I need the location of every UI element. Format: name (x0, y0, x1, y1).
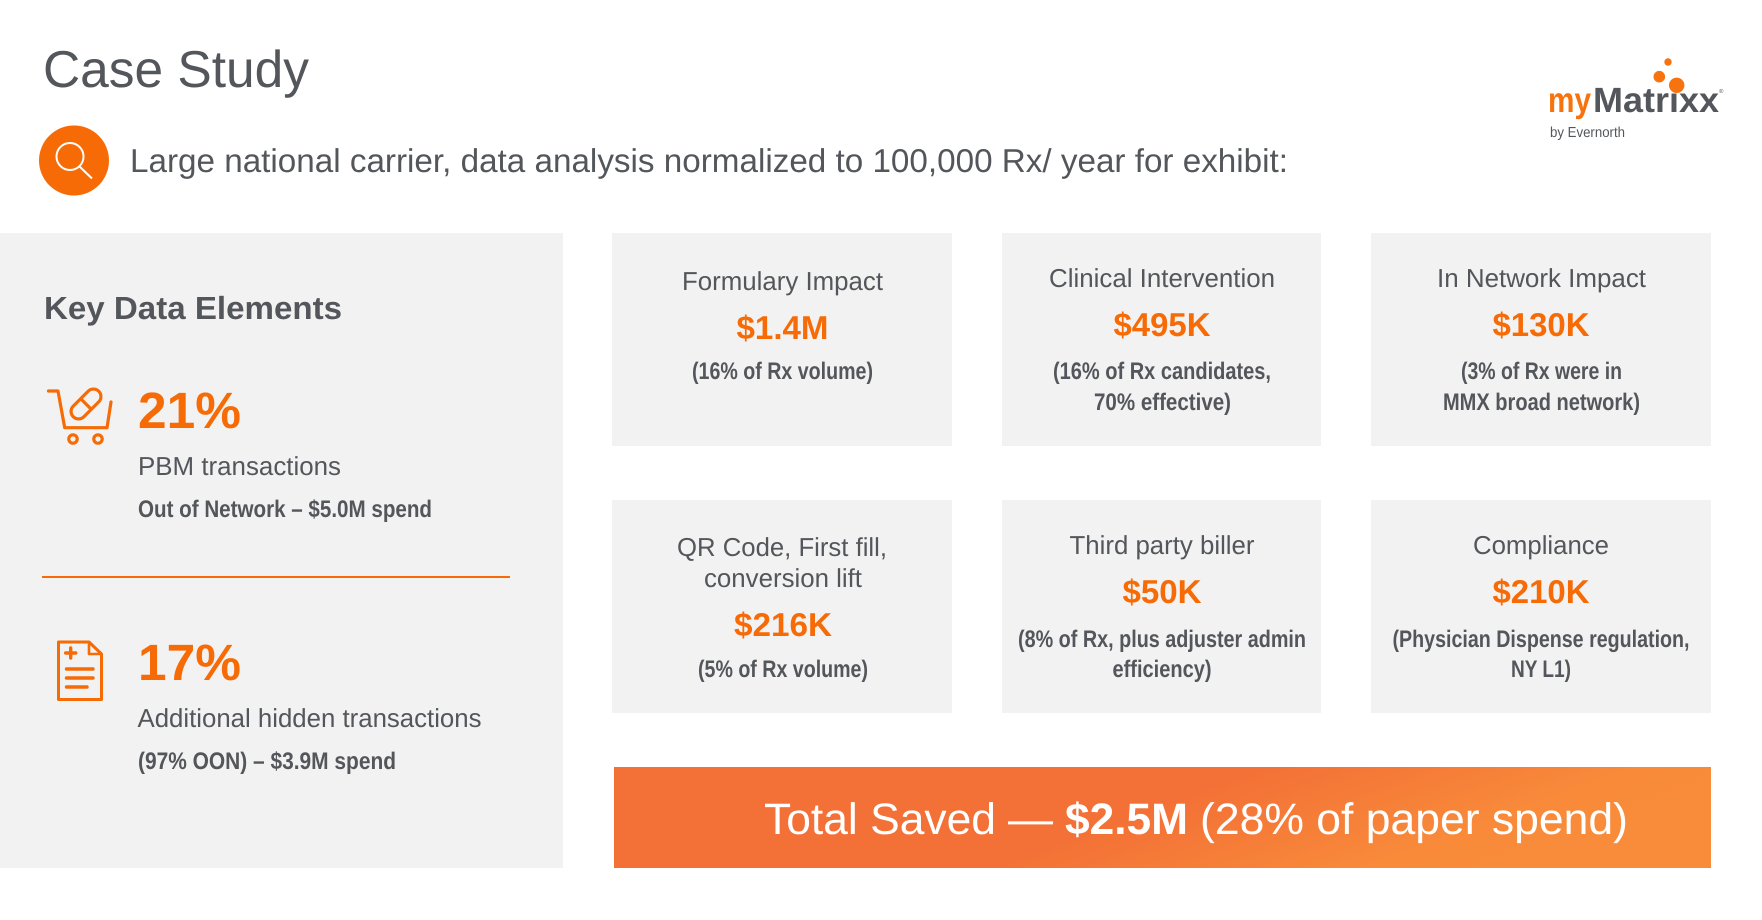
logo: myMatrixx by Evernorth: Matrixx (1593, 81, 1720, 120)
card: in network impact: In Network Impact (1437, 263, 1647, 293)
detail: out of network spend: Out of Network – $5.0M spend (138, 496, 432, 523)
card: clinical intervention: (16% of Rx candidates, (1053, 358, 1271, 385)
banner: total saved: — (1008, 795, 1053, 844)
card: third party biller: Third party biller (1070, 530, 1255, 560)
banner: total saved (614, 767, 1711, 868)
card: compliance: NY L1) (1511, 656, 1571, 683)
banner: total saved: $2.5M (1065, 795, 1188, 844)
card: formulary impact (612, 233, 952, 446)
card: formulary impact: $1.4M (736, 309, 828, 346)
icon: magnifying glass (39, 126, 109, 196)
card: compliance: $210K (1492, 573, 1590, 610)
card: clinical intervention: 70% effective) (1094, 389, 1231, 416)
card: clinical intervention (1002, 233, 1321, 446)
logo: myMatrixx by Evernorth: my (1548, 81, 1591, 120)
card: QR code conversion lift: (5% of Rx volume) (698, 656, 868, 683)
detail: OON spend: (97% OON) – $3.9M spend (138, 748, 396, 775)
logo: myMatrixx by Evernorth (1548, 58, 1724, 141)
card: QR code conversion lift (612, 500, 952, 713)
logo: myMatrixx by Evernorth: ® (1719, 88, 1724, 95)
card: third party biller: efficiency) (1112, 656, 1212, 683)
subtitle: Large national carrier, data analysis normalized to 100,000 Rx/ year for exhibit: (130, 142, 1288, 179)
card: in network impact: MMX broad network) (1443, 389, 1640, 416)
icon: shopping cart with pill (48, 386, 111, 443)
panel: key data elements (0, 233, 563, 868)
stat: 17%: 17% (138, 634, 241, 691)
banner: total saved: Total Saved (764, 795, 996, 844)
card: QR code conversion lift: conversion lift (704, 563, 863, 593)
label: PBM transactions: PBM transactions (138, 451, 341, 481)
stat: 21%: 21% (138, 382, 241, 439)
card: QR code conversion lift: QR Code, First fill, (677, 532, 887, 562)
card: formulary impact: (16% of Rx volume) (692, 358, 873, 385)
icon: medical document (58, 642, 102, 700)
card: formulary impact: Formulary Impact (682, 266, 884, 296)
title: Case Study (43, 41, 309, 99)
card: clinical intervention: $495K (1114, 306, 1211, 343)
card: in network impact: (3% of Rx were in (1461, 358, 1622, 385)
card: in network impact: $130K (1492, 306, 1590, 343)
card: third party biller (1002, 500, 1321, 713)
card: QR code conversion lift: $216K (734, 606, 832, 643)
card: third party biller: $50K (1122, 573, 1202, 610)
heading: key data elements: Key Data Elements (44, 290, 342, 326)
card: compliance: (Physician Dispense regulation, (1392, 626, 1690, 653)
card: compliance (1371, 500, 1711, 713)
card: compliance: Compliance (1473, 530, 1609, 560)
label: additional hidden transactions: Additional hidden transactions (138, 703, 482, 733)
card: in network impact (1371, 233, 1711, 446)
card: third party biller: (8% of Rx, plus adjuster admin (1018, 626, 1306, 653)
logo: myMatrixx by Evernorth: by Evernorth (1550, 125, 1625, 141)
card: clinical intervention: Clinical Intervention (1049, 263, 1275, 293)
banner: total saved: (28% of paper spend) (1200, 795, 1628, 844)
